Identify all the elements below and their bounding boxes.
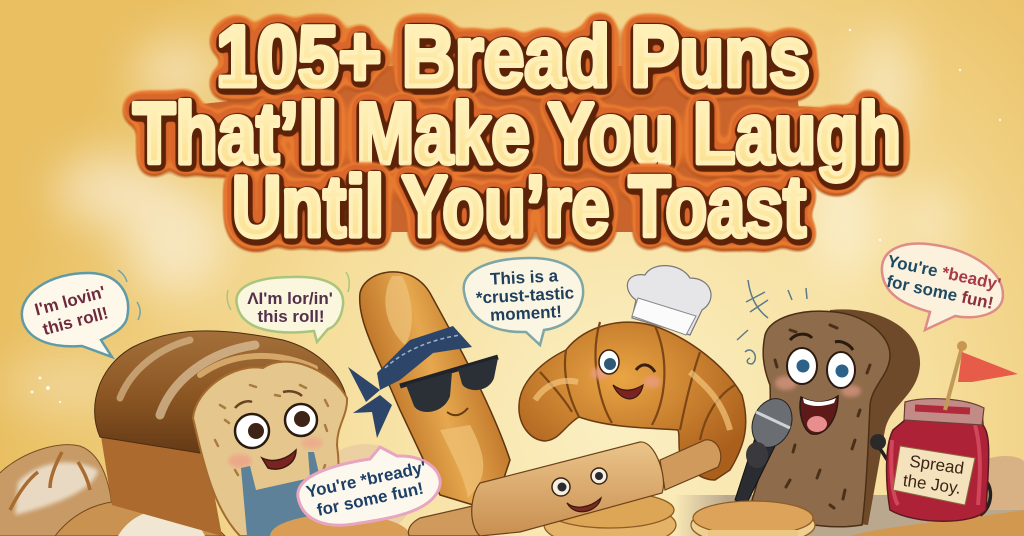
loaf slice face <box>193 362 347 536</box>
table surface <box>675 495 1024 536</box>
jam jar <box>870 399 990 521</box>
speech bubble: bready <box>298 447 440 525</box>
title <box>133 9 901 255</box>
jar label <box>893 446 975 505</box>
speech bubble: crust-tastic <box>464 258 583 345</box>
toast crust <box>820 309 920 525</box>
pin eyes <box>552 468 607 496</box>
rolling pin character <box>408 440 721 536</box>
crust streaks <box>120 340 190 398</box>
back bun <box>315 444 415 536</box>
croissant mouth <box>613 385 643 399</box>
speech bubble: beady: for some fun! <box>885 272 995 313</box>
toast arm <box>875 445 990 515</box>
title backing plate <box>165 70 875 228</box>
crumb texture <box>215 385 328 475</box>
pin mouth <box>567 498 601 512</box>
speech bubble: crust-tastic: moment! <box>490 302 562 325</box>
speech bubble: I'm lovin' this roll <box>22 270 140 357</box>
croissant body <box>519 322 746 480</box>
jar label text: Spread <box>908 452 965 478</box>
sunglasses <box>400 357 498 412</box>
loaf character <box>95 331 347 536</box>
mouth <box>262 450 296 469</box>
loaf side <box>100 430 222 536</box>
flour specks <box>30 29 1001 403</box>
speech bubble: I'm lovin' this roll: this roll! <box>41 303 110 339</box>
bottom centre bun <box>270 514 410 536</box>
croissant character <box>519 266 746 480</box>
round loaf bottom left <box>0 445 113 536</box>
jar label text: the Joy. <box>902 471 962 498</box>
bandana <box>348 326 472 438</box>
chef hat <box>627 266 711 335</box>
speech bubble: crust-tastic: This is a <box>490 266 559 289</box>
title line 1: 105+ Bread Puns <box>216 9 810 105</box>
speech bubble: beady: You're *beady' <box>886 251 1003 294</box>
croissant layers <box>540 322 735 440</box>
white floured bread bottom <box>55 501 225 536</box>
right side bread <box>985 456 1024 510</box>
croissant eyes <box>599 350 655 374</box>
baguette character <box>348 272 510 507</box>
pancake stack under pin <box>544 492 676 536</box>
baguette smile <box>447 408 468 415</box>
toast blush <box>775 376 797 390</box>
speech bubble: bready: for some fun! <box>315 479 425 520</box>
jar body <box>887 405 989 521</box>
speech bubble: I'm lovin' this roll: I'm lovin' <box>33 282 107 319</box>
toast face <box>752 311 890 527</box>
pin barrel <box>472 442 663 536</box>
speech bubble: green: ΛI'm lor/in' <box>247 289 333 308</box>
toast character <box>752 309 920 527</box>
microphone <box>735 393 799 505</box>
blush <box>228 454 252 468</box>
speech bubble: bready: You're *bready' <box>304 458 428 502</box>
pin handles <box>660 440 721 490</box>
croissant blush <box>591 367 609 379</box>
overalls <box>241 452 330 536</box>
flag <box>945 341 1018 410</box>
baguette body <box>360 272 510 507</box>
pancake right <box>691 501 815 536</box>
motion marks <box>737 280 807 364</box>
speech bubble: crust-tastic: *crust-tastic <box>475 283 575 308</box>
speech bubble: beady <box>882 244 1003 330</box>
toast specks <box>775 325 870 508</box>
toast mouth <box>800 396 838 434</box>
eyes <box>235 391 317 448</box>
speech bubble: green: this roll! <box>257 307 325 326</box>
toast eyes <box>787 334 855 388</box>
loaf top crust <box>95 331 347 453</box>
speech bubble: green <box>227 272 349 342</box>
title line 3: Until You’re Toast <box>232 159 806 255</box>
